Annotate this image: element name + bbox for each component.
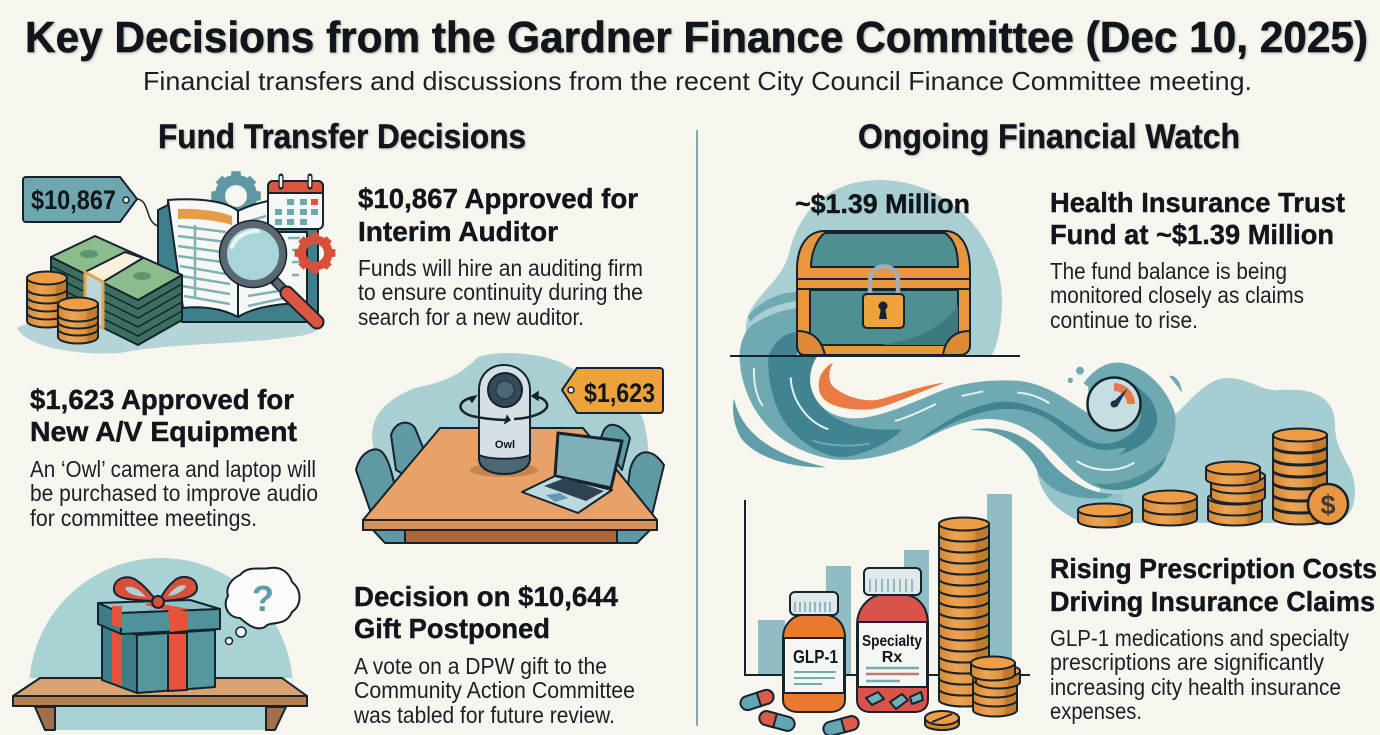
- icon: Owl camera: [460, 365, 547, 477]
- text: rising prescription costs: increasing city health insurance: [1050, 674, 1341, 700]
- text: interim auditor: to ensure continuity during the: [358, 279, 643, 305]
- text: A/V equipment: be purchased to improve audio: [30, 480, 318, 506]
- text: health insurance trust fund: [1050, 187, 1345, 333]
- bar chart: [745, 494, 1030, 675]
- text: A/V equipment: [30, 384, 318, 531]
- text: A/V equipment: An ‘Owl’ camera and laptop will: [30, 456, 316, 482]
- blob behind chest: [746, 180, 1002, 356]
- icon: red gear: [295, 233, 335, 273]
- shelf: [13, 678, 307, 706]
- text: gift postponed: A vote on a DPW gift to the: [354, 653, 607, 679]
- icon: small coin stack: [971, 656, 1020, 716]
- illustration: conference table with Owl camera and laptop: [356, 353, 664, 543]
- text: health insurance trust fund: continue to rise.: [1050, 307, 1198, 333]
- text: A/V equipment: New A/V Equipment: [30, 416, 297, 447]
- text: A/V equipment: $1,623 Approved for: [30, 384, 294, 415]
- icon: loose pills and tablet: [739, 688, 959, 735]
- icon: rising coin stacks: $: [1320, 490, 1336, 520]
- text: A/V equipment: for committee meetings.: [30, 505, 257, 531]
- icon: rising coin stacks: [1078, 428, 1348, 528]
- wave above the line: [748, 292, 797, 322]
- text: gift postponed: Decision on $10,644: [354, 581, 618, 612]
- text: gift postponed: [353, 581, 635, 728]
- text: health insurance trust fund: The fund balance is being: [1050, 258, 1287, 284]
- icon: GLP-1 bottle: GLP-1: [793, 647, 838, 667]
- price tag: $10,867: [23, 177, 137, 222]
- illustration: gift on shelf with question cloud: [13, 558, 307, 730]
- icon: GLP-1 bottle: [783, 592, 845, 712]
- text: rising prescription costs: GLP-1 medications and specialty: [1050, 625, 1349, 651]
- table: [363, 428, 657, 530]
- icon: gift box: [98, 577, 220, 693]
- heading: fund transfer decisions: Fund Transfer Decisions: [158, 118, 526, 156]
- text: health insurance trust fund: monitored closely as claims: [1050, 282, 1304, 308]
- icon: Specialty Rx bottle: [857, 568, 928, 712]
- illustration: audit book, cash and coins: [17, 172, 335, 353]
- text: health insurance trust fund: Health Insurance Trust: [1050, 187, 1345, 218]
- icon: laptop: [522, 433, 622, 513]
- subtitle: Financial transfers and discussions from the recent City Council Finance Committee meeting.: [143, 66, 1252, 96]
- text: gift postponed: was tabled for future review.: [353, 702, 615, 728]
- icon: Specialty Rx bottle: Specialty: [862, 633, 922, 650]
- text: gift postponed: Community Action Committee: [354, 677, 635, 703]
- text: health insurance trust fund: Fund at ~$1.39 Million: [1050, 219, 1334, 250]
- price tag: $1,623: [562, 368, 663, 413]
- bow: [114, 577, 197, 601]
- icon: magnifying glass: [220, 220, 317, 322]
- padlock: [870, 266, 898, 298]
- label: ~$1.39 million: ~$1.39 Million: [795, 189, 970, 219]
- text: interim auditor: search for a new auditor.: [358, 304, 584, 330]
- icon: chairs: [356, 423, 664, 543]
- title: Key Decisions from the Gardner Finance Committee (Dec 10, 2025): [25, 13, 1368, 62]
- icon: teal gear: [212, 172, 260, 220]
- icon: coin stacks: [27, 272, 98, 344]
- text: interim auditor: Funds will hire an auditing firm: [358, 255, 643, 281]
- blob behind coins: [1100, 378, 1355, 523]
- text: rising prescription costs: expenses.: [1050, 698, 1142, 724]
- text: interim auditor: $10,867 Approved for: [358, 183, 638, 214]
- heading: ongoing financial watch: Ongoing Financial Watch: [858, 118, 1240, 156]
- icon: treasure chest: [797, 231, 970, 355]
- icon: Owl camera: Owl: [495, 439, 515, 451]
- price tag: $10,867: $10,867: [31, 185, 116, 215]
- text: interim auditor: [358, 183, 643, 330]
- text: rising prescription costs: prescriptions are significantly: [1050, 649, 1324, 675]
- price tag: $1,623: $1,623: [584, 378, 655, 408]
- text: gift postponed: Gift Postponed: [354, 613, 550, 644]
- illustration: prescription bottles, bar chart and coins: [739, 494, 1030, 735]
- icon: cash stack: [51, 236, 182, 345]
- icon: Specialty Rx bottle: Rx: [882, 649, 902, 666]
- icon: tall coin stack: [939, 518, 989, 706]
- text: rising prescription costs: Driving Insurance Claims: [1050, 586, 1375, 617]
- icon: gauge: [1088, 378, 1140, 430]
- text: rising prescription costs: [1050, 553, 1377, 724]
- thought cloud with question mark: [226, 568, 300, 644]
- text: interim auditor: Interim Auditor: [358, 216, 558, 247]
- illustration: treasure chest, wave and gauge: [730, 180, 1355, 528]
- thought cloud with question mark: ?: [252, 578, 274, 619]
- icon: calendar: [268, 176, 323, 229]
- wave below the line: [733, 356, 1182, 520]
- orange swoosh: [819, 363, 945, 410]
